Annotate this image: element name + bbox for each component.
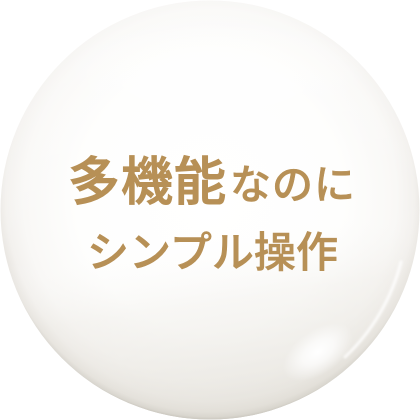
highlight: upper sheen (55, 15, 375, 135)
heading line 1 (68, 154, 355, 212)
highlight: lower right (273, 311, 363, 393)
heading line 2: シンプル操作 (87, 229, 338, 276)
heading line 1: なのに (230, 162, 355, 208)
rim light: lower right (345, 262, 401, 357)
heading line 1: 多機能 (68, 154, 226, 212)
